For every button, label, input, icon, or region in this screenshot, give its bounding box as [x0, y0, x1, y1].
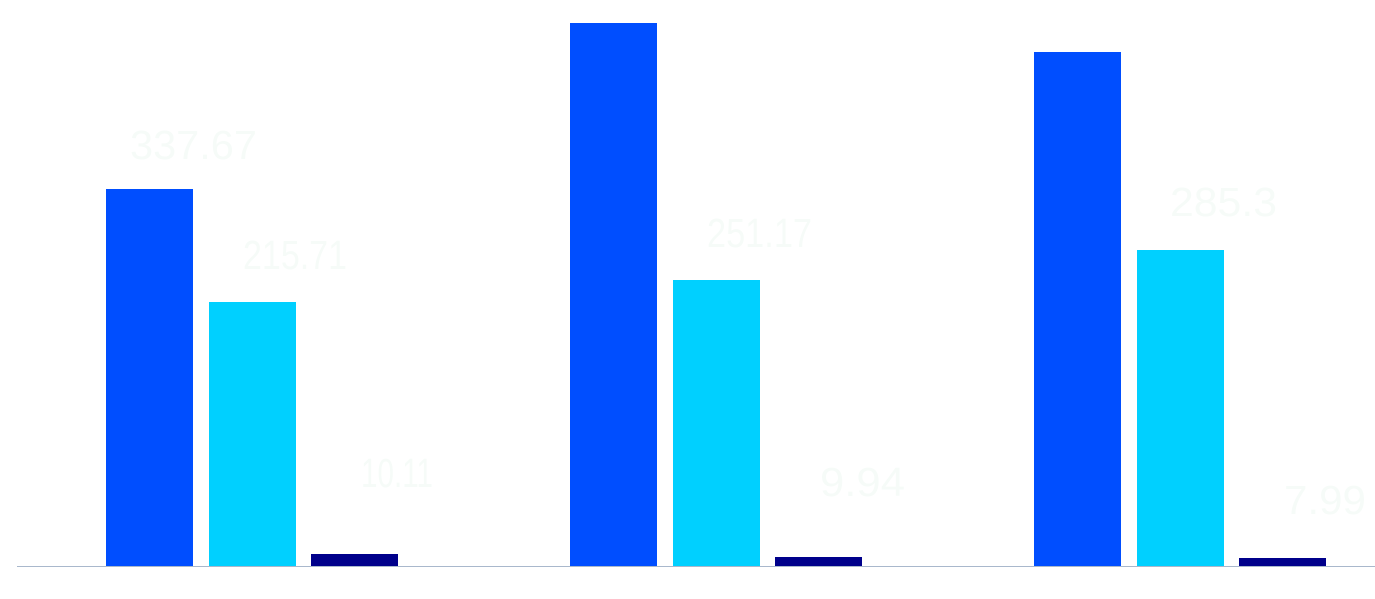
value label 9.94: 9.94 — [820, 459, 905, 505]
bar: group 2 series 3 — [775, 557, 862, 566]
bar: group 2 series 1 — [570, 23, 657, 566]
bar: group 3 series 2 — [1137, 250, 1224, 566]
value label 337.67: 337.67 — [130, 122, 257, 168]
value label 10.11: 10.11 — [361, 450, 433, 496]
value label 215.71: 215.71 — [243, 232, 347, 278]
value label 7.99: 7.99 — [1284, 477, 1366, 523]
value label 285.3: 285.3 — [1170, 179, 1277, 225]
bar: group 2 series 2 — [673, 280, 760, 566]
bar: group 3 series 1 — [1034, 52, 1121, 566]
x axis line — [17, 566, 1375, 567]
group 1 — [106, 122, 433, 566]
bar: group 3 series 3 — [1239, 558, 1326, 566]
value label 251.17: 251.17 — [707, 210, 812, 256]
bar: group 1 series 2 — [209, 302, 296, 566]
bar: group 1 series 3 — [311, 554, 398, 566]
bar: group 1 series 1 — [106, 189, 193, 566]
group 3 — [1034, 52, 1366, 566]
group 2 — [570, 23, 905, 566]
